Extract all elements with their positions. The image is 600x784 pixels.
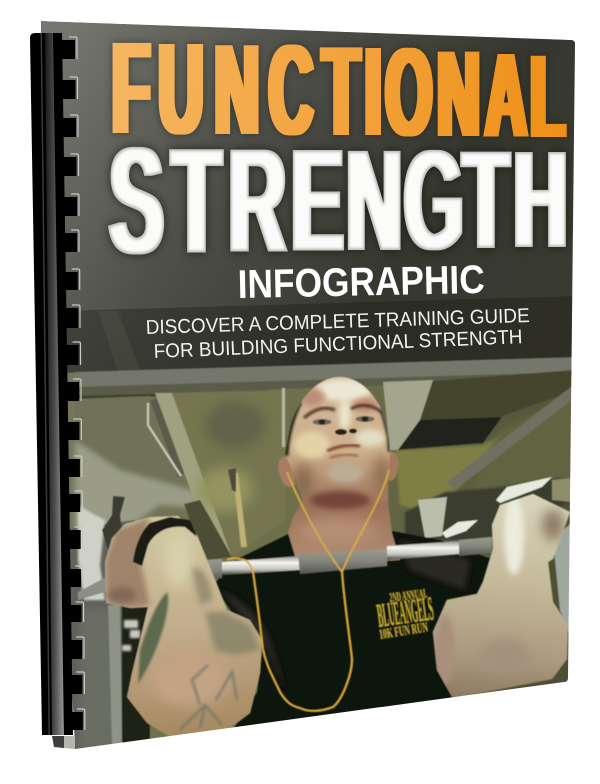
green tattoo [138,592,168,684]
upper cover background [41,21,580,395]
white beam edge [148,403,181,476]
FUNCTIONAL heading: N [437,26,480,163]
comb binding spine [30,33,85,735]
FUNCTIONAL heading: L [530,30,565,162]
nose highlight [339,398,351,430]
FUNCTIONAL heading: U [158,16,203,161]
FUNCTIONAL heading: N [215,18,259,162]
STRENGTH heading: R [228,118,286,284]
STRENGTH heading: H [514,124,567,277]
cheeks [294,431,330,459]
left arm [105,516,262,737]
photo base [67,372,571,739]
mouth [327,445,360,451]
FUNCTIONAL heading: C [269,20,313,162]
brows [304,408,335,418]
FUNCTIONAL heading: O [385,22,432,162]
shirt lettering [375,588,434,640]
right rack [554,523,570,633]
FUNCTIONAL heading: T [323,21,360,163]
under-chin shadow [310,491,370,509]
nostrils [335,429,347,435]
spider tattoo [180,665,237,730]
pink elbow [150,654,230,706]
earphone wire [227,470,389,711]
FUNCTIONAL heading: I [365,22,382,162]
barbell [206,537,492,580]
jaw shadows [293,464,313,500]
concrete ceiling center [172,390,271,513]
STRENGTH heading: G [404,122,464,280]
right arm [433,494,570,697]
right ear [386,452,399,481]
column [418,497,447,538]
right ceiling [478,401,571,488]
pale column [383,380,433,450]
dark lower zone [405,478,572,540]
faint photo shape behind subtitle [98,311,140,372]
comb teeth [62,40,83,730]
left bar segment [78,578,106,600]
comb tooth highlights [69,37,85,730]
olive wall [395,438,498,508]
back page bottom edge [52,736,75,749]
wristwatch [133,517,197,566]
pale pole [233,473,247,547]
STRENGTH heading: T [463,121,509,278]
stubble sides [286,402,300,456]
photo scene [60,357,580,760]
subtitle line 1: DISCOVER A COMPLETE TRAINING GUIDE [145,305,530,339]
skull tattoo [205,612,260,655]
STRENGTH heading: N [346,119,402,281]
forehead highlight [315,379,371,401]
t-shirt [216,530,490,728]
FUNCTIONAL heading: F [112,14,150,161]
left ear [278,456,295,487]
ceiling lights [496,477,552,503]
ceiling top beam [75,357,580,387]
subtitle dark band [60,296,580,373]
shirt lettering: 2ND ANNUAL [389,585,428,605]
INFOGRAPHIC subheading: INFOGRAPHIC [237,258,485,307]
subtitle line 2: FOR BUILDING FUNCTIONAL STRENGTH [153,326,523,363]
hand shading [105,517,150,608]
lower-left pale ceiling [72,440,195,528]
left ceiling [106,396,150,398]
spine body [30,33,73,735]
dark corner beam [184,500,232,560]
back page top edge [41,21,65,33]
STRENGTH heading: E [291,119,344,282]
diagonal duct [447,386,572,490]
chin [327,463,363,483]
upper tattoo [192,568,212,605]
STRENGTH heading: T [172,117,221,285]
diagonal light beam [155,393,232,557]
air vent [398,417,502,450]
FUNCTIONAL heading: A [485,28,527,162]
side beam shadow [150,398,184,478]
STRENGTH heading: S [109,115,164,285]
head and neck [278,377,400,566]
ceiling pipe [79,375,502,396]
shirt lettering: 10K FUN RUN [378,620,429,643]
photo background [60,357,580,755]
eyes [312,419,332,425]
spine highlight stripe [45,33,64,735]
ceiling panel right [420,370,575,420]
neck [298,518,378,546]
vertical white pipe [282,388,285,447]
left gym machine [70,520,136,749]
